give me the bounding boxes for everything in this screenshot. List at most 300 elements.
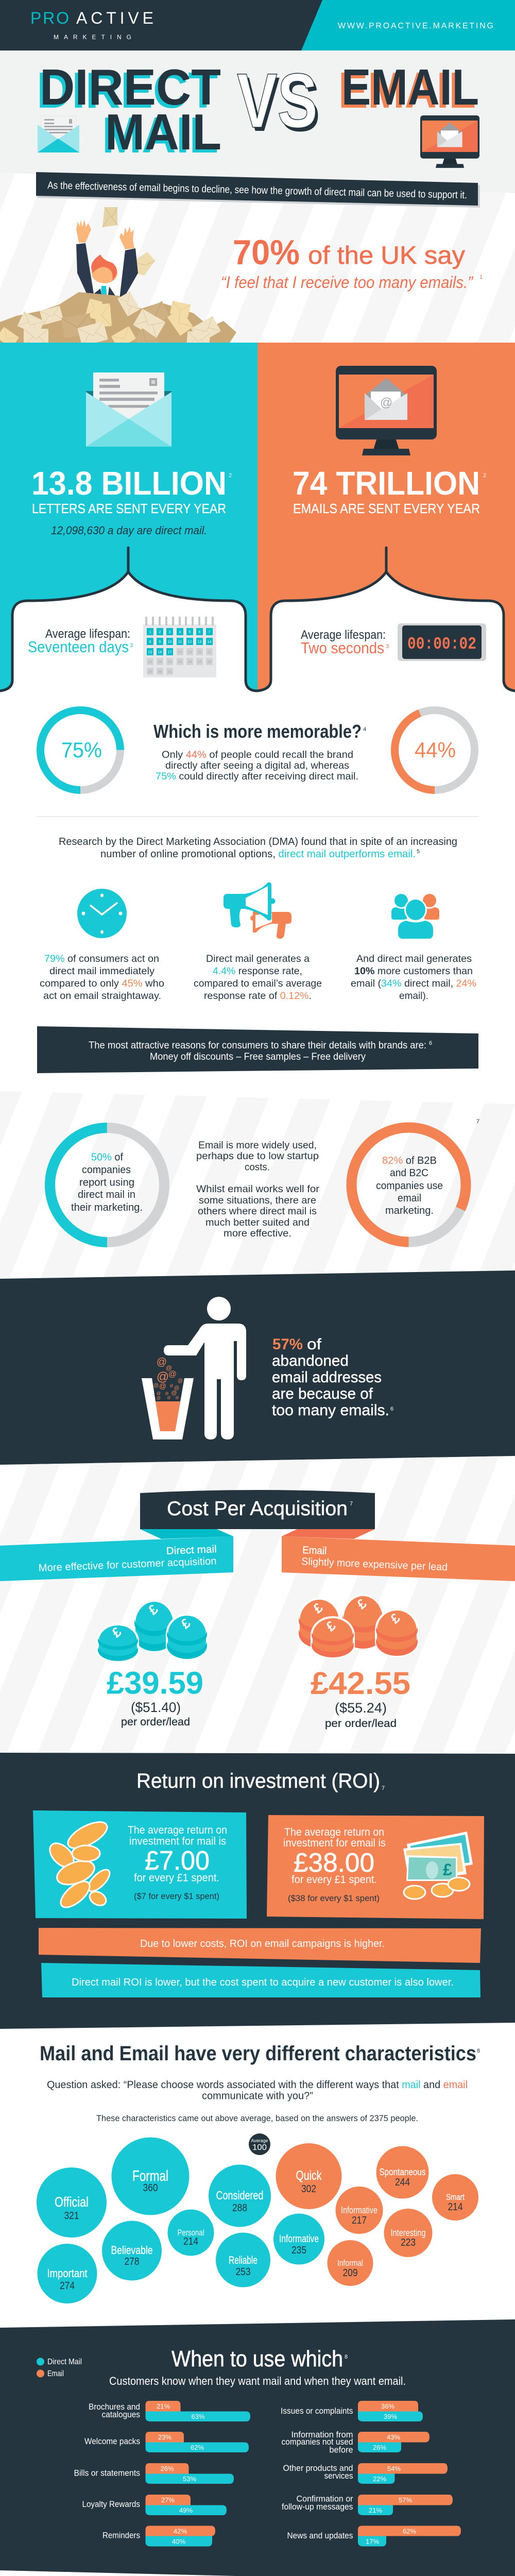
- bar chart: email favoured: companies not used: [281, 2437, 353, 2447]
- callout: direct mail ROI lower: Direct mail ROI is lower, but the cost spent to acquire a new customer is also lower.: [72, 1977, 454, 1988]
- ring: 50 percent direct mail: their marketing.: [71, 1202, 143, 1213]
- stat: 57 percent: 6: [390, 1406, 393, 1412]
- icon: calendar: 29: [148, 670, 152, 674]
- bar chart: email favoured: Other products and: [283, 2464, 353, 2473]
- lifespan text: [301, 628, 389, 657]
- price: direct mail: £39.59: [107, 1665, 203, 1700]
- email bubbles: 302: [301, 2183, 316, 2195]
- stat: 13.8 billion: 13.8 BILLION: [31, 465, 227, 502]
- icon: calendar: 18: [178, 651, 182, 654]
- icon: calendar: 2: [159, 631, 161, 634]
- column: more customers: And direct mail generates: [356, 953, 472, 964]
- memorable: mail ring: 75%: [61, 738, 102, 762]
- bar chart: email favoured: News and updates: [287, 2531, 353, 2540]
- stat: 57 percent: are because of: [272, 1385, 373, 1402]
- memorable: email ring: [394, 710, 475, 790]
- website url: WWW.PROACTIVE.MARKETING: [338, 22, 493, 30]
- icon: small monitor: [420, 115, 479, 168]
- icon: calendar: 24: [168, 660, 171, 664]
- stat: 74 trillion: EMAILS ARE SENT EVERY YEAR: [293, 501, 480, 516]
- falling at symbols: [153, 1357, 183, 1400]
- column: act on mail: direct mail immediately: [49, 965, 154, 977]
- mail bubbles: Believable: [111, 2244, 152, 2257]
- striped section 3: [0, 1456, 515, 1754]
- bar chart: direct mail favoured: 53%: [183, 2475, 196, 2483]
- header band: [0, 0, 515, 50]
- mail bubbles: Informative: [279, 2233, 319, 2245]
- mail bubbles: 278: [125, 2256, 139, 2267]
- bar chart: direct mail favoured: Brochures and: [89, 2402, 140, 2412]
- ring: 82 percent email: 82% of B2B: [382, 1155, 437, 1166]
- price: email: [311, 1666, 410, 1730]
- intro banner: [36, 172, 480, 208]
- icon: calendar: 31: [168, 670, 171, 674]
- falling at symbols: @: [165, 1392, 169, 1396]
- card: email ROI: ($38 for every $1 spent): [288, 1893, 380, 1903]
- ring: 82 percent email: companies use: [376, 1180, 443, 1192]
- title: direct mail: DIRECT: [40, 59, 221, 115]
- column: response rate: response rate of 0.12%.: [204, 990, 312, 1002]
- falling at symbols: @: [157, 1396, 161, 1400]
- column: act on mail: compared to only 45% who: [40, 978, 164, 989]
- logo: MARKETING: [54, 33, 131, 41]
- icon: calendar: 28: [208, 660, 211, 664]
- bar chart: direct mail favoured: 49%: [179, 2506, 193, 2514]
- bar chart: email favoured: 21%: [369, 2506, 382, 2514]
- title: vs: VS: [237, 57, 318, 144]
- man: [76, 219, 138, 312]
- icon: calendar: 6: [199, 631, 201, 634]
- icon: calendar: 11: [178, 640, 182, 644]
- stat: 57 percent: email addresses: [272, 1369, 382, 1386]
- icon: clock: [77, 889, 127, 938]
- logo: PRO: [30, 9, 69, 27]
- panel: return on investment: [0, 1753, 515, 2029]
- headline: 70 percent: “I feel that I receive too many emails.”: [221, 273, 473, 292]
- ribbon: email: Slightly more expensive per lead: [301, 1556, 448, 1573]
- ring: 50 percent direct mail: direct mail in: [78, 1189, 135, 1200]
- icon: calendar: 21: [208, 651, 211, 654]
- legend: Direct Mail: [47, 2358, 82, 2366]
- survey question text: [47, 2079, 468, 2123]
- ribbon: direct mail: More effective for customer acquisition: [38, 1555, 217, 1574]
- text: email more widely used: more effective.: [224, 1228, 291, 1239]
- stat: 74 trillion: 74 TRILLION: [293, 465, 480, 502]
- bar chart: email favoured: 62%: [403, 2528, 416, 2535]
- heading: Customers know when they want mail and when they want email.: [109, 2375, 406, 2387]
- falling at symbols: @: [175, 1396, 179, 1400]
- mail bubbles: Official: [55, 2194, 89, 2210]
- bar chart: direct mail favoured: 63%: [191, 2413, 205, 2420]
- bar chart: direct mail favoured: 40%: [172, 2538, 185, 2545]
- bubble: average: [249, 2133, 270, 2155]
- falling at symbols: @: [167, 1396, 171, 1400]
- lifespan text: Seventeen days: [28, 638, 129, 656]
- icon: large envelope: [86, 372, 171, 447]
- card: mail ROI: investment for mail is: [129, 1835, 226, 1848]
- banner: reasons to share details: 6: [429, 1040, 432, 1046]
- column: response rate: compared to email’s average: [194, 978, 322, 989]
- bar chart: email favoured: 39%: [384, 2413, 397, 2420]
- bar chart: email favoured: 22%: [373, 2475, 386, 2483]
- research intro text: Research by the Direct Marketing Association (DMA) found that in spite of an increasing: [59, 836, 457, 848]
- ring: 50 percent direct mail: 50% of: [91, 1152, 123, 1163]
- title: email: EMAIL: [341, 59, 479, 115]
- icon: calendar: 26: [188, 660, 192, 664]
- callout: email ROI higher: Due to lower costs, ROI on email campaigns is higher.: [140, 1938, 385, 1950]
- ring: 82 percent email: and B2C: [390, 1167, 428, 1179]
- research intro text: [59, 836, 457, 860]
- icon: calendar: 14: [208, 640, 211, 644]
- icon: teal coin stacks: £: [109, 1624, 125, 1640]
- bar chart: direct mail favoured: Bills or statements: [74, 2469, 140, 2478]
- falling at symbols: @: [157, 1391, 161, 1396]
- memorable: mail ring: [40, 710, 121, 790]
- text: email more widely used: much better suited and: [205, 1217, 310, 1228]
- icon: calendar: 15: [148, 651, 152, 654]
- research intro text: 5: [417, 849, 420, 855]
- icon: gold coins: [45, 1817, 113, 1912]
- mail bubbles: 235: [291, 2245, 306, 2256]
- column: more customers: email (34% direct mail, 24%: [351, 978, 476, 989]
- survey question text: communicate with you?”: [202, 2091, 313, 2102]
- ribbon: direct mail: Direct mail: [166, 1544, 217, 1557]
- icon: teal coin stacks: [98, 1601, 207, 1661]
- card: mail ROI: for every £1 spent.: [134, 1872, 219, 1884]
- icon: calendar: 23: [158, 660, 162, 664]
- email bubbles: Informative: [341, 2205, 377, 2215]
- mail bubbles: Formal: [132, 2168, 168, 2184]
- memorable: text: 75% could directly after receiving direct mail.: [156, 771, 358, 782]
- bar chart: email favoured: 36%: [381, 2402, 394, 2410]
- icon: people: [391, 894, 439, 940]
- text: email more widely used: Whilst email works well for: [196, 1183, 320, 1195]
- email bubbles: 209: [343, 2267, 357, 2279]
- icon: small envelope: [38, 116, 79, 152]
- icon: teal coin stacks: £: [178, 1615, 194, 1632]
- heading ribbon: cost per acquisition: Cost Per Acquisition: [167, 1498, 348, 1520]
- ribbon: direct mail: [0, 1529, 233, 1581]
- stat: 57 percent: abandoned: [272, 1352, 349, 1369]
- mail bubbles: [37, 2137, 324, 2303]
- bar chart: direct mail favoured: 62%: [191, 2444, 204, 2451]
- bar chart: direct mail favoured: catalogues: [102, 2410, 140, 2419]
- icon: orange coin stacks: [299, 1595, 418, 1657]
- card: mail ROI: £7.00: [145, 1846, 210, 1876]
- bar chart: email favoured: Confirmation or: [297, 2495, 353, 2504]
- mail bubbles: Reliable: [229, 2255, 258, 2266]
- email bubbles: 244: [395, 2177, 410, 2188]
- banner: reasons to share details: [37, 1026, 478, 1073]
- falling at symbols: @: [166, 1364, 172, 1371]
- column: response rate: [194, 953, 322, 1002]
- bar chart: direct mail favoured: Reminders: [102, 2531, 140, 2540]
- column: more customers: [351, 953, 476, 1002]
- panel: direct mail volume: [0, 343, 258, 693]
- bar chart: email favoured: 43%: [387, 2433, 400, 2441]
- striped section 1: [0, 173, 515, 343]
- icon: orange coin stacks: £: [387, 1610, 403, 1626]
- icon: calendar: 7: [209, 631, 211, 634]
- mail bubbles: 360: [143, 2182, 158, 2194]
- stat: 13.8 billion: 2: [229, 472, 232, 479]
- bracket: direct mail lifespan: [0, 548, 258, 721]
- mail bubbles: 288: [232, 2202, 247, 2214]
- ring: 82 percent email: email: [398, 1193, 421, 1204]
- icon: calendar: 25: [178, 660, 182, 664]
- mail bubbles: 321: [64, 2210, 79, 2222]
- icon: orange coin stacks: £: [354, 1596, 370, 1612]
- memorable: text: 4: [363, 726, 366, 733]
- bubble: average: 100: [252, 2143, 267, 2152]
- price: direct mail: per order/lead: [121, 1716, 190, 1728]
- memorable: text: [153, 721, 366, 782]
- bar chart: direct mail favoured: [74, 2401, 250, 2546]
- text: email more widely used: Email is more widely used,: [198, 1140, 317, 1151]
- falling at symbols: @: [169, 1384, 174, 1388]
- memorable: text: directly after seeing a digital ad, whereas: [165, 760, 349, 771]
- bar chart: email favoured: [281, 2401, 461, 2546]
- title: direct mail: MAIL: [105, 104, 221, 160]
- email bubbles: Informal: [337, 2258, 363, 2268]
- legend: Email: [47, 2369, 64, 2378]
- stat: 13.8 billion: LETTERS ARE SENT EVERY YEAR: [32, 501, 226, 516]
- bar chart: email favoured: before: [330, 2445, 353, 2454]
- research intro text: number of online promotional options, direct mail outperforms email.: [100, 849, 416, 860]
- bar chart: email favoured: 17%: [366, 2538, 379, 2545]
- email bubbles: Interesting: [390, 2228, 425, 2238]
- text: email more widely used: [196, 1140, 320, 1239]
- falling at symbols: @: [157, 1370, 169, 1384]
- bar chart: email favoured: 54%: [387, 2465, 401, 2472]
- text: email more widely used: others where direct mail is: [198, 1206, 317, 1217]
- heading: 8: [345, 2354, 348, 2360]
- envelope pile: [0, 292, 236, 352]
- bar chart: direct mail favoured: 27%: [161, 2496, 175, 2504]
- lifespan text: [28, 627, 133, 656]
- card: email ROI: The average return on: [284, 1826, 384, 1838]
- stat: 74 trillion: 2: [483, 472, 486, 479]
- falling at symbols: @: [157, 1357, 167, 1368]
- falling at symbols: @: [159, 1382, 166, 1390]
- card: mail ROI: [33, 1810, 247, 1919]
- card: mail ROI: The average return on: [128, 1824, 227, 1836]
- lifespan text: Average lifespan:: [301, 628, 386, 642]
- stat: 57 percent: too many emails.: [272, 1402, 389, 1419]
- bar chart: direct mail favoured: Welcome packs: [84, 2437, 140, 2446]
- price: email: ($55.24): [335, 1700, 387, 1716]
- price: email: £42.55: [311, 1666, 410, 1701]
- column: response rate: Direct mail generates a: [206, 953, 310, 964]
- flying envelopes: [102, 207, 155, 276]
- card: email ROI: for every £1 spent.: [291, 1874, 377, 1886]
- heading ribbon: cost per acquisition: 7: [350, 1501, 353, 1507]
- ring: 82 percent email: 7: [476, 1118, 479, 1125]
- stat: 57 percent: 57%: [272, 1336, 303, 1353]
- memorable: email ring: 44%: [415, 738, 456, 762]
- falling at symbols: @: [171, 1390, 177, 1396]
- ring: 82 percent email: marketing.: [385, 1205, 434, 1216]
- icon: calendar: 4: [179, 631, 181, 634]
- bar chart: direct mail favoured: 26%: [160, 2465, 174, 2472]
- mail bubbles: Personal: [177, 2228, 204, 2238]
- card: email ROI: [267, 1815, 484, 1919]
- logo: [30, 9, 153, 41]
- card: email ROI: £38.00: [294, 1848, 374, 1878]
- title: direct mail: DIRECT: [37, 62, 218, 118]
- title area background: [0, 50, 515, 193]
- icon: calendar: 10: [168, 640, 171, 644]
- card: mail ROI: ($7 for every $1 spent): [134, 1891, 219, 1901]
- memorable: text: Only 44% of people could recall the brand: [162, 749, 353, 760]
- icon: calendar: [143, 617, 216, 677]
- email bubbles: 217: [352, 2215, 367, 2226]
- bar chart: email favoured: 57%: [399, 2496, 412, 2504]
- bar chart: direct mail favoured: 21%: [157, 2402, 170, 2410]
- falling at symbols: @: [168, 1370, 177, 1379]
- title: vs: VS: [239, 61, 320, 147]
- icon: calendar: 22: [148, 660, 152, 664]
- striped section 2: [0, 1091, 515, 1279]
- lifespan text: Average lifespan:: [45, 627, 130, 641]
- icon: calendar: 13: [198, 640, 201, 644]
- falling at symbols: @: [153, 1383, 159, 1388]
- icon: teal coin stacks: £: [145, 1601, 161, 1618]
- bar chart: email favoured: follow-up messages: [282, 2502, 353, 2512]
- mail bubbles: 253: [236, 2266, 250, 2278]
- callout: direct mail ROI lower: [41, 1963, 480, 1997]
- ribbon: email: Email: [302, 1545, 327, 1557]
- mail bubbles: 274: [60, 2280, 75, 2292]
- icon: digital clock: [398, 623, 486, 661]
- icon: banknotes and coins: £: [443, 1860, 452, 1879]
- lifespan text: 3: [130, 642, 133, 649]
- bar chart: email favoured: Issues or complaints: [281, 2406, 353, 2416]
- icon: large monitor: [336, 366, 437, 455]
- ring: 50 percent direct mail: [50, 1128, 164, 1242]
- panel: email volume: [258, 343, 515, 693]
- headline: 70 percent: [221, 233, 483, 292]
- bracket: email lifespan: [258, 548, 515, 721]
- panel: when to use which: [0, 2319, 515, 2576]
- falling at symbols: @: [174, 1385, 179, 1391]
- heading: characteristics: 8: [477, 2048, 480, 2054]
- bubble: average: Average: [251, 2138, 268, 2143]
- icon: calendar: 17: [168, 651, 171, 654]
- title: direct mail: [37, 59, 221, 163]
- panel: abandoned addresses: [0, 1270, 515, 1465]
- price: direct mail: ($51.40): [131, 1700, 181, 1715]
- icon: calendar: 19: [188, 651, 192, 654]
- column: more customers: email).: [399, 990, 428, 1002]
- panel: return on investment: 7: [382, 1785, 385, 1791]
- icon: calendar: 20: [198, 651, 201, 654]
- icon: megaphones: [224, 883, 291, 939]
- email bubbles: Smart: [446, 2192, 465, 2202]
- column: act on mail: 79% of consumers act on: [44, 953, 159, 964]
- icon: banknotes and coins: [403, 1832, 473, 1899]
- legend: [37, 2358, 82, 2378]
- survey question text: These characteristics came out above average, based on the answers of 2375 people.: [96, 2113, 418, 2123]
- falling at symbols: @: [178, 1378, 183, 1384]
- logo: ACTIVE: [76, 9, 153, 27]
- email bubbles: 223: [401, 2237, 416, 2248]
- price: direct mail: [107, 1665, 203, 1728]
- stat: 57 percent: of: [307, 1336, 322, 1353]
- lifespan text: 3: [386, 643, 389, 650]
- heading ribbon: cost per acquisition: [140, 1490, 375, 1529]
- column: act on mail: [40, 953, 164, 1002]
- headline: 70 percent: 70%: [233, 233, 300, 272]
- email bubbles: Quick: [296, 2168, 322, 2183]
- headline: 70 percent: 1: [479, 274, 483, 280]
- icon: calendar: 16: [158, 651, 162, 654]
- mail bubbles: 214: [183, 2236, 198, 2247]
- icon: digital clock: 00:00:02: [407, 635, 476, 654]
- icon: calendar: 5: [189, 631, 191, 634]
- survey question text: Question asked: “Please choose words associated with the different ways that mail and email: [47, 2079, 468, 2091]
- price: email: per order/lead: [325, 1718, 397, 1730]
- banner: reasons to share details: Money off discounts – Free samples – Free delivery: [150, 1051, 366, 1062]
- mail bubbles: Considered: [216, 2189, 264, 2202]
- heading: Return on investment (ROI): [136, 1770, 380, 1792]
- icon: calendar: 8: [149, 640, 151, 644]
- card: email ROI: investment for email is: [283, 1837, 386, 1849]
- bar chart: email favoured: 26%: [373, 2444, 386, 2451]
- ribbon: email: [282, 1529, 515, 1581]
- icon: orange coin stacks: £: [310, 1600, 326, 1616]
- title: email: EMAIL: [338, 62, 476, 118]
- icon: calendar: 27: [198, 660, 201, 664]
- headline: 70 percent: of the UK say: [308, 242, 466, 269]
- icon: calendar: 12: [188, 640, 192, 644]
- icon: calendar: 3: [169, 631, 171, 634]
- text: email more widely used: some situations, there are: [199, 1195, 316, 1206]
- column: act on mail: act on email straightaway.: [43, 990, 161, 1002]
- memorable: text: Which is more memorable?: [153, 721, 362, 742]
- text: email more widely used: costs.: [245, 1161, 270, 1173]
- illustration: man buried in envelopes: [0, 207, 236, 352]
- icon: large monitor: @: [380, 396, 392, 410]
- bar chart: direct mail favoured: 23%: [158, 2433, 171, 2441]
- email bubbles: 214: [448, 2201, 462, 2213]
- mail bubbles: Important: [47, 2267, 88, 2280]
- bar chart: direct mail favoured: 42%: [174, 2528, 187, 2535]
- title: direct mail: MAIL: [102, 107, 218, 163]
- banner: reasons to share details: The most attractive reasons for consumers to share their details with brands are:: [89, 1040, 426, 1051]
- bar chart: email favoured: services: [324, 2471, 353, 2481]
- callout: email ROI higher: [39, 1928, 481, 1963]
- ring: 50 percent direct mail: report using: [79, 1177, 134, 1188]
- ring: 50 percent direct mail: companies: [82, 1164, 131, 1176]
- column: response rate: 4.4% response rate,: [213, 965, 302, 977]
- icon: calendar: 1: [149, 631, 151, 634]
- lifespan text: Two seconds: [301, 639, 384, 657]
- bubble chart: [37, 2133, 478, 2303]
- bar chart: email favoured: Information from: [291, 2430, 353, 2439]
- icon: orange coin stacks: £: [323, 1618, 339, 1634]
- text: email more widely used: perhaps due to low startup: [196, 1150, 319, 1162]
- stat: 13.8 billion: 12,098,630 a day are direct mail.: [51, 524, 207, 537]
- heading: When to use which: [171, 2346, 343, 2371]
- bar chart: direct mail favoured: Loyalty Rewards: [82, 2500, 140, 2509]
- stat: 13.8 billion: [31, 465, 232, 537]
- column: more customers: 10% more customers than: [354, 965, 473, 977]
- icon: calendar: 9: [159, 640, 161, 644]
- ring: 82 percent email: [351, 1118, 479, 1242]
- email bubbles: [276, 2143, 478, 2286]
- stat: 57 percent: [272, 1336, 393, 1419]
